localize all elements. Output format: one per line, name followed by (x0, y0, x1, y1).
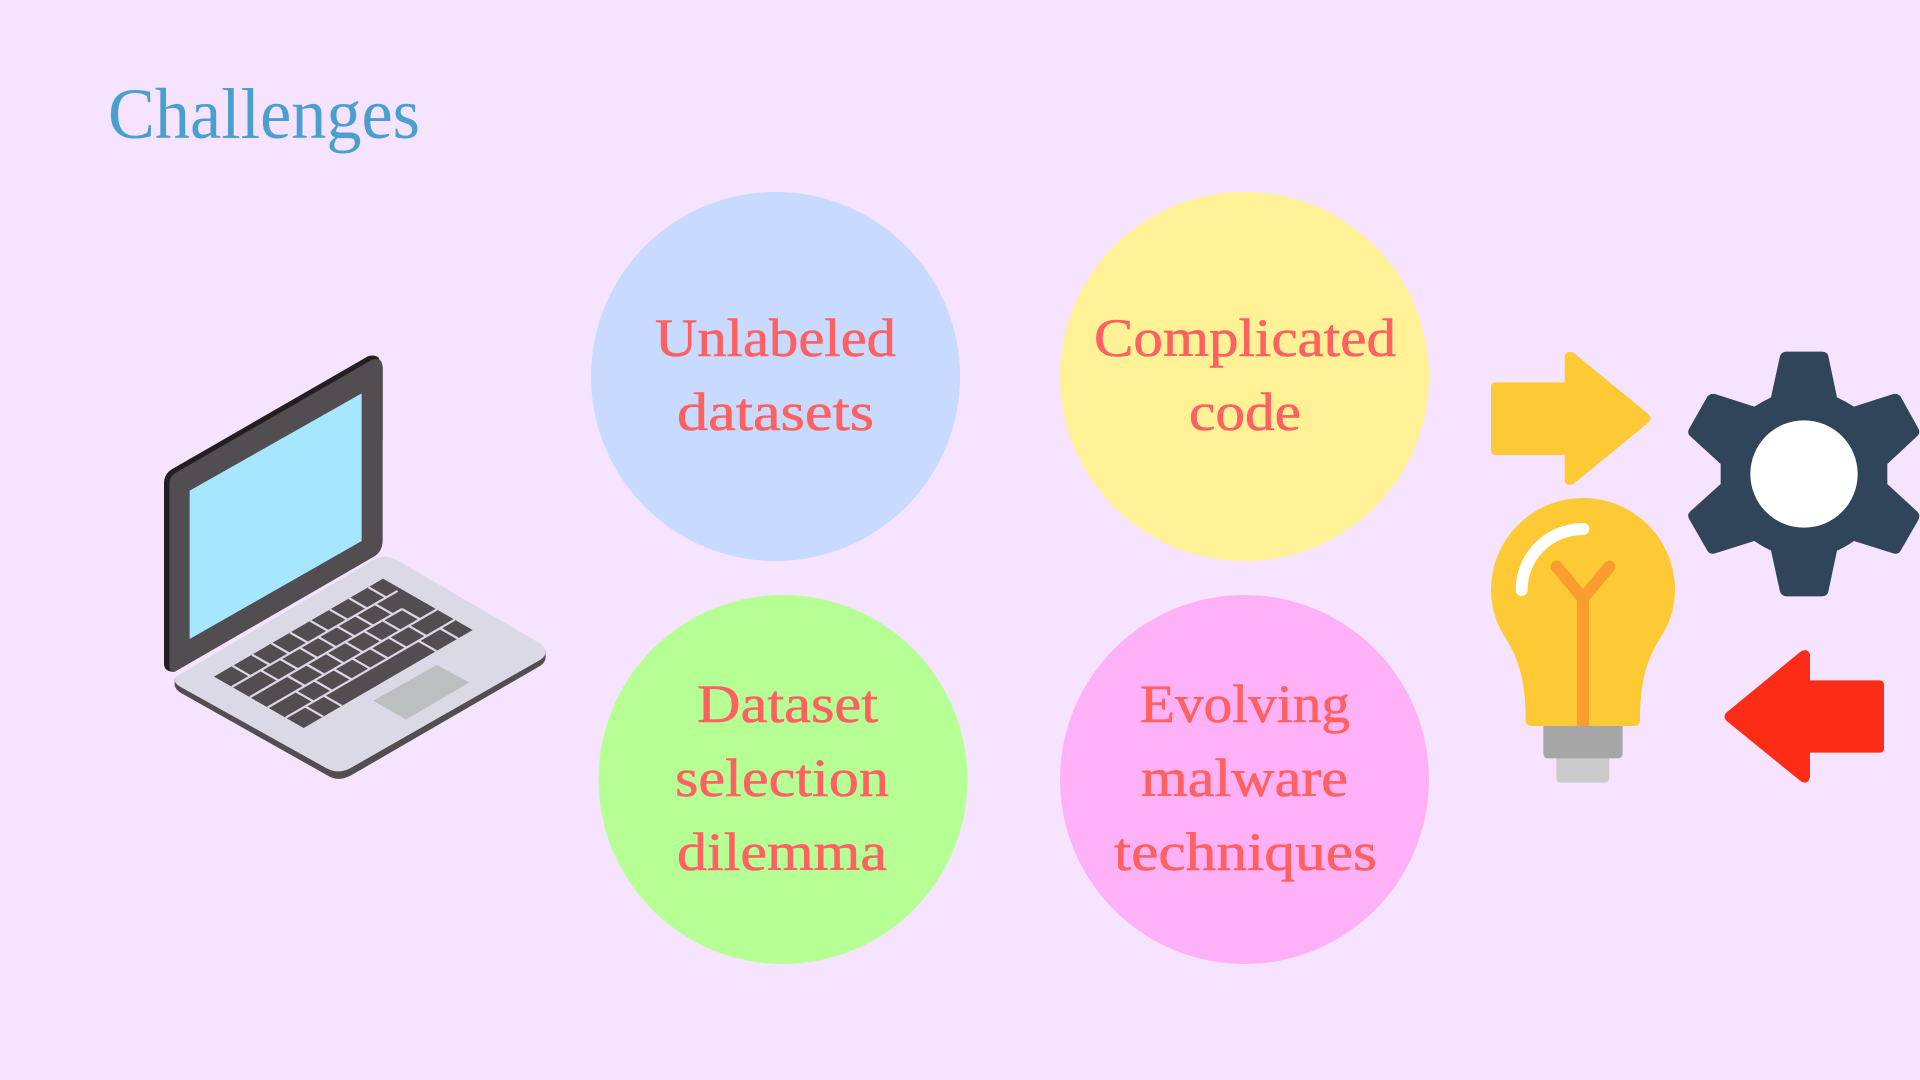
panel: complicated code: Complicated (1094, 308, 1396, 368)
panel: unlabeled datasets: Unlabeled (655, 308, 896, 368)
panel: evolving malware techniques: malware (1141, 748, 1348, 808)
panel: complicated code (1060, 192, 1429, 561)
panel: unlabeled datasets (591, 192, 960, 561)
panel: dataset selection dilemma: Dataset (697, 674, 878, 734)
arrow: red pointing left (1724, 650, 1884, 783)
trackpad (373, 665, 469, 720)
panel: dataset selection dilemma (598, 595, 968, 964)
icon: gear (1688, 352, 1919, 596)
laptop lid (164, 355, 383, 672)
panel: dataset selection dilemma: selection (675, 748, 889, 808)
panel: evolving malware techniques: techniques (1114, 822, 1377, 882)
panel: dataset selection dilemma: dilemma (677, 822, 887, 882)
arrow: yellow pointing right (1491, 352, 1650, 485)
panel: unlabeled datasets: datasets (677, 382, 874, 442)
laptop screen (190, 393, 362, 639)
panel: evolving malware techniques: Evolving (1140, 674, 1350, 734)
icon: laptop (164, 355, 546, 779)
panel: complicated code: code (1189, 382, 1301, 442)
keyboard (214, 579, 473, 728)
laptop base (175, 557, 546, 779)
icon: light bulb (1491, 498, 1675, 783)
title: Challenges (108, 74, 420, 154)
panel: evolving malware techniques (1060, 595, 1429, 964)
icon group: arrows, gear and light bulb (1491, 352, 1919, 783)
